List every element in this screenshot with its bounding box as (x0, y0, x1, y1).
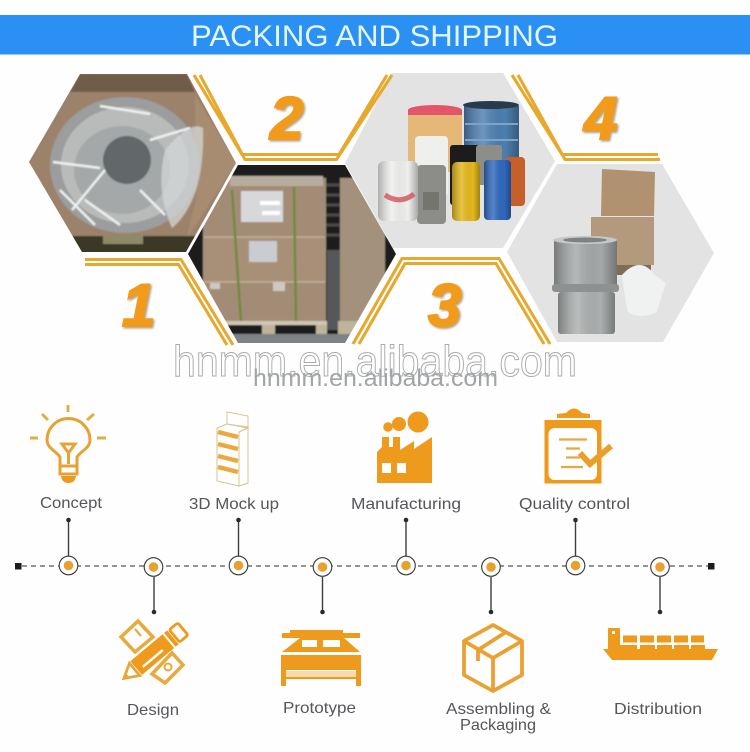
title banner: PACKING AND SHIPPING (191, 20, 558, 53)
label: Concept: Concept (40, 495, 103, 512)
icon: container ship (603, 628, 718, 660)
photo 2: palletised cartons (185, 163, 400, 346)
icon: light bulb (30, 405, 106, 483)
watermark small: hnmm.en.alibaba.com (253, 365, 498, 392)
label: Prototype: Prototype (283, 700, 356, 717)
label: Quality control: Quality control (519, 496, 630, 513)
label: Manufacturing: Manufacturing (351, 496, 461, 513)
label: Design: Design (127, 702, 179, 719)
gold frame 2 (194, 75, 392, 160)
gold frame 4 (512, 75, 660, 160)
icon: design pencil and ruler (117, 621, 189, 686)
gold frame 1 (85, 260, 233, 345)
photo 4: cartons with perforated filter elements (500, 160, 720, 345)
icon: 3D display shelf (217, 412, 248, 486)
label: Assembling and Packaging: Packaging (460, 717, 536, 734)
timeline (15, 518, 714, 614)
watermark outline: hnmm.en.alibaba.com (173, 337, 577, 386)
number 4: 4 (583, 85, 617, 152)
number 1: 1 (122, 272, 155, 339)
label: Distribution: Distribution (614, 701, 702, 718)
number 2: 2 (269, 85, 303, 152)
label: Assembling and Packaging (446, 701, 551, 734)
icon: prototype flatbed machine (281, 630, 361, 686)
icon: assembling box (464, 625, 522, 691)
icon: quality control clipboard (544, 408, 611, 484)
photo 1: wrapped disc in cardboard box (25, 70, 240, 256)
label: 3D Mock up: 3D Mock up (189, 496, 279, 513)
gold frame 3 (353, 258, 550, 344)
photo 3: assorted filters (340, 70, 560, 250)
label: Assembling and Packaging: Assembling & (446, 701, 551, 718)
icon: factory (377, 412, 432, 483)
title banner (0, 15, 750, 54)
number 3: 3 (428, 272, 461, 339)
